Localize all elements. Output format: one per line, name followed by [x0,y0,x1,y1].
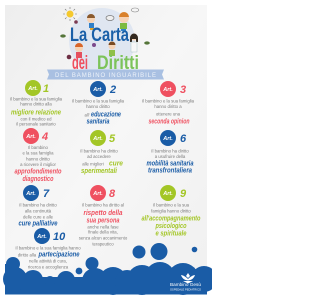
article 3: Art. [162,87,173,93]
title: dei Diritti: Diritti [97,53,139,74]
article 5: cure [109,160,123,168]
article 1: Il bambino e la sua famiglia [10,96,63,102]
article 3: 3 [180,84,186,96]
article 9: Art. [162,191,173,197]
icon: flower centre [92,43,96,47]
article 1 [10,80,63,126]
article 5: Art. [92,136,103,142]
article 3: seconda opinion [148,118,190,126]
icon: flower lower [67,55,71,59]
article 10: ricerca e accoglienza [28,264,69,270]
article 6: transfrontaliera [148,168,192,174]
article 2: sanitaria [86,118,110,126]
article 5: sperimentali [81,168,118,175]
article 2: hanno diritto [86,104,110,109]
child: top right [119,12,129,31]
article 9: Il bambino e la sua [153,202,190,208]
article 8: rispetto della [84,210,123,217]
child: top left [87,14,95,30]
article 8 [79,185,128,246]
article 5: Il bambino ha diritto [80,148,118,154]
article 8: Il bambino ha diritto al [82,202,124,208]
article 1: migliore relazione [11,110,61,116]
article 7 [18,185,58,228]
article 8: 8 [109,188,116,200]
article 8: senza alcun accanimento [79,236,128,240]
article 4: e la sua famiglia [22,150,54,156]
child: girl with red hair [75,43,83,58]
logo: Bambino Gesù: OSPEDALE PEDIATRICO [170,288,201,292]
article 1: Art. [27,86,38,92]
icon: cloud small [106,16,114,20]
logo: Bambino Gesù: Bambino Gesù [170,282,202,287]
article 3 [142,81,195,126]
article 2 [72,81,125,126]
article 7: alla continuità [25,208,52,214]
article 5: ad accedere [87,154,111,159]
child: centre [108,42,116,56]
article 8: terapeutico [92,242,114,246]
icon: cloud outline [131,8,139,12]
logo: Bambino Gesù [170,273,202,292]
title: dei Diritti: dei [72,53,88,74]
article 7: delle cure e alle [23,214,54,220]
icon: sun [63,7,77,21]
article 10: Art. [36,234,47,240]
title: dei Diritti [72,53,139,74]
article 9 [142,185,201,238]
article 10: Il bambino e la sua famiglia hanno [15,246,81,250]
article 10 [15,228,81,270]
article 1: hanno diritto alla [20,102,52,106]
article 5 [80,130,123,175]
article 3: ottenere una [156,112,181,116]
icon: leaf left [60,34,66,38]
article 6 [146,130,194,174]
icon: flower top [74,20,78,24]
article 6: a usufruire della [155,154,186,159]
ribbon: del bambino inguaribile: DEL BAMBINO INGUARIBILE [55,73,156,79]
article 9: famiglia hanno diritto [151,208,191,214]
article 6: 6 [180,133,187,145]
article 1: 1 [43,83,49,95]
doctor [130,34,138,52]
article 9: psicologico [155,223,187,230]
article 7: cure palliative [18,220,58,228]
article 6: Il bambino ha diritto [151,148,189,154]
article 7: 7 [43,188,50,200]
title: La Carta: La Carta [70,25,129,46]
article 8: anche nella fase [87,224,119,230]
article 4: hanno diritto [26,156,50,162]
article 5: 5 [109,133,116,145]
article 2: educazione [91,112,121,118]
article 10: nelle attività di cura, [29,258,67,264]
article 2: Il bambino e la sua famiglia [72,98,125,104]
article 4: diagnostico [22,176,54,183]
article 2: 2 [109,84,116,96]
article 7: Art. [25,191,36,197]
article 8: finale della vita, [88,230,118,234]
article 2: Art. [92,87,103,93]
article 5: alle migliori [82,162,104,166]
article 6: Art. [162,136,173,142]
article 2: all' [84,112,90,118]
article 7: Il bambino ha diritto [19,202,57,208]
article 1: con il medico ed [20,116,52,122]
article 8: Art. [92,191,103,197]
article 4: approfondimento [14,168,62,176]
article 1: il personale sanitario [16,122,56,126]
article 10: diritto alla [18,252,37,258]
article 9: e spirituale [156,230,187,238]
article 4: Art. [25,134,36,140]
article 4 [14,128,62,183]
article 10: partecipazione [38,252,80,258]
article 4: Il bambino [28,145,49,150]
article 9: 9 [180,188,187,200]
article 6: mobilità sanitaria [146,160,194,168]
article 4: 4 [41,131,48,143]
article 4: a ricevere il miglior [20,162,56,167]
article 3: Il bambino e la sua famiglia [142,98,195,104]
article 8: sua persona [86,218,120,224]
article 10: 10 [53,231,66,243]
panel: background [5,5,207,294]
ribbon: del bambino inguaribile [47,70,164,80]
article 3: hanno diritto a [154,104,182,109]
bottom blue cloud shape [3,243,217,295]
icon: leaf right [144,41,150,45]
illustration: children behind the title [60,7,150,74]
